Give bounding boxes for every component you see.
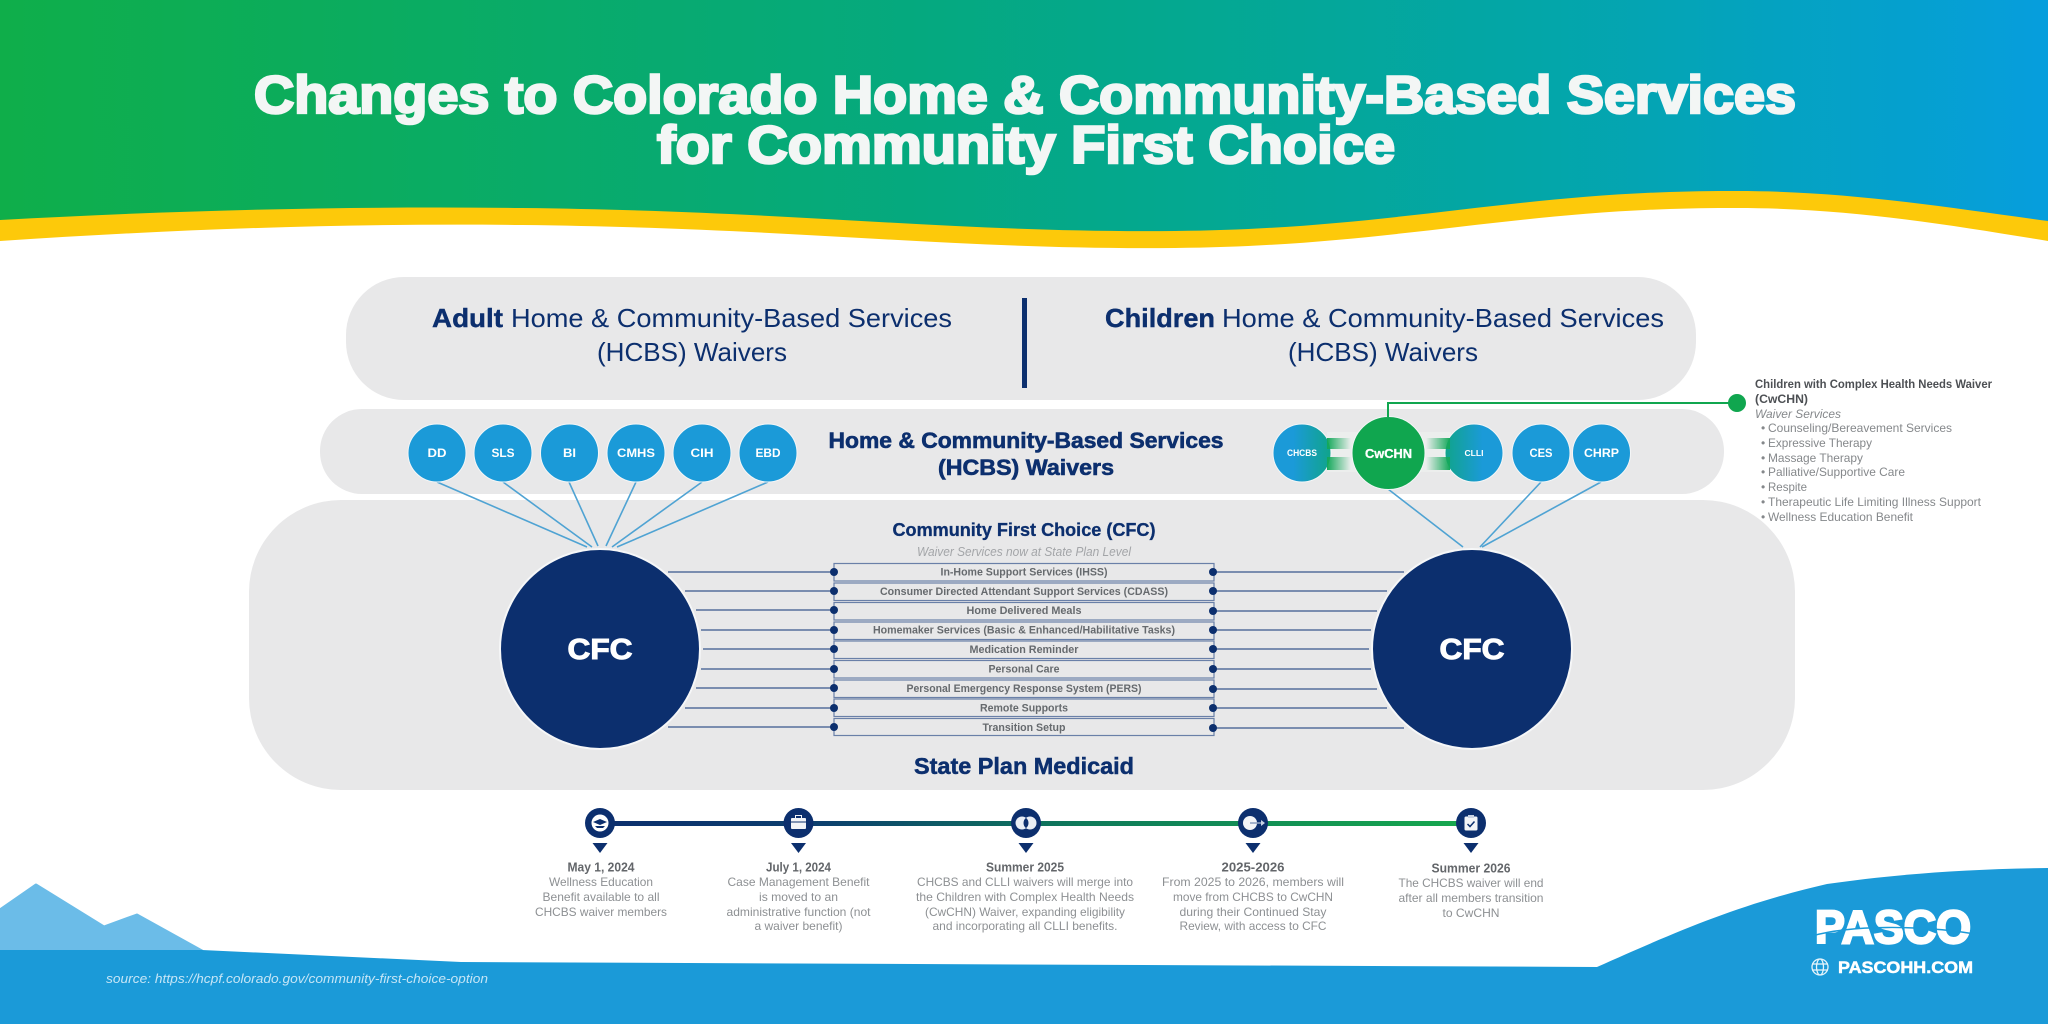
panel: HCBS waivers band: (HCBS) Waivers bbox=[938, 455, 1114, 480]
right waiver circles: CES bbox=[1530, 448, 1553, 460]
right waiver circles: CLLI bbox=[1464, 448, 1484, 458]
callout: CwCHN waiver services: Counseling/Bereavement Services bbox=[1768, 421, 1952, 435]
callout: CwCHN waiver services: • bbox=[1761, 480, 1765, 494]
callout: CwCHN waiver services: • bbox=[1761, 495, 1765, 509]
timeline milestone: Summer 2026 bbox=[1398, 808, 1544, 920]
title: for Community First Choice bbox=[657, 116, 1395, 175]
callout: CwCHN waiver services: • bbox=[1761, 436, 1765, 450]
callout: CwCHN waiver services: • bbox=[1761, 421, 1765, 435]
right CFC circle bbox=[1372, 549, 1572, 749]
timeline milestone: July 1, 2024: Case Management Benefit bbox=[728, 875, 870, 889]
PASCO logo: PASCO bbox=[1815, 901, 1971, 953]
panel: adult and children waivers: (HCBS) Waivers bbox=[1288, 337, 1478, 367]
timeline milestone: Summer 2026: The CHCBS waiver will end bbox=[1398, 876, 1544, 890]
connector lines: left waivers to CFC bbox=[437, 482, 768, 547]
callout connector: CwCHN to details bbox=[1388, 394, 1746, 417]
timeline milestone: Summer 2025: and incorporating all CLLI benefits. bbox=[932, 919, 1118, 933]
timeline milestone: July 1, 2024: is moved to an bbox=[759, 890, 838, 904]
timeline milestone: 2025-2026: during their Continued Stay bbox=[1180, 905, 1326, 919]
timeline milestone: Summer 2025: the Children with Complex Health Needs bbox=[916, 890, 1134, 904]
left waiver circles: DD bbox=[428, 448, 446, 460]
connector lines: right waivers to CFC bbox=[1388, 482, 1601, 547]
panel: adult and children waivers: Adult bbox=[432, 303, 503, 333]
left waiver circles bbox=[408, 424, 797, 482]
panel: adult and children waivers bbox=[346, 277, 1696, 400]
services list: Personal Emergency Response System (PERS) bbox=[906, 683, 1142, 695]
panel: HCBS waivers band bbox=[320, 409, 1724, 494]
timeline milestone: Summer 2026: after all members transition bbox=[1398, 891, 1544, 905]
timeline line bbox=[600, 821, 1471, 826]
callout: CwCHN waiver services: Waiver Services bbox=[1755, 407, 1841, 421]
right waiver circles: CwCHN bbox=[1365, 446, 1412, 461]
timeline milestone: May 1, 2024: Benefit available to all bbox=[542, 890, 660, 904]
timeline milestone: Summer 2026: to CwCHN bbox=[1442, 906, 1500, 920]
left waiver circles: CMHS bbox=[617, 448, 655, 460]
timeline milestone: July 1, 2024 bbox=[726, 808, 871, 933]
timeline milestone: Summer 2026: Summer 2026 bbox=[1432, 860, 1510, 876]
header banner bbox=[0, 0, 2048, 280]
callout: CwCHN waiver services: Palliative/Supportive Care bbox=[1768, 465, 1905, 479]
title bbox=[254, 66, 1796, 175]
left waiver circles: BI bbox=[563, 448, 576, 460]
callout: CwCHN waiver services: Massage Therapy bbox=[1768, 451, 1863, 465]
source note: source: https://hcpf.colorado.gov/community-first-choice-option bbox=[106, 971, 488, 986]
timeline milestone: Summer 2025 bbox=[916, 808, 1134, 933]
panel: state plan medicaid: Community First Choice (CFC) bbox=[892, 520, 1156, 540]
callout: CwCHN waiver services: • bbox=[1761, 451, 1765, 465]
callout: CwCHN waiver services: (CwCHN) bbox=[1755, 394, 1808, 406]
callout: CwCHN waiver services: Respite bbox=[1768, 480, 1807, 494]
callout: CwCHN waiver services: Wellness Education Benefit bbox=[1768, 510, 1914, 524]
right waiver circles bbox=[1273, 416, 1630, 490]
callout: CwCHN waiver services: • bbox=[1761, 510, 1765, 524]
timeline milestone: July 1, 2024: July 1, 2024 bbox=[766, 860, 832, 874]
services list bbox=[834, 564, 1214, 736]
panel: state plan medicaid: Waiver Services now at State Plan Level bbox=[917, 545, 1132, 559]
timeline milestone: May 1, 2024: Wellness Education bbox=[549, 875, 653, 889]
callout: CwCHN waiver services: Therapeutic Life Limiting Illness Support bbox=[1768, 495, 1982, 509]
timeline milestone: July 1, 2024: a waiver benefit) bbox=[754, 919, 842, 933]
panel: adult and children waivers: Children bbox=[1105, 303, 1215, 333]
timeline milestone: May 1, 2024 bbox=[535, 808, 667, 919]
right waiver circles: CHCBS bbox=[1287, 448, 1317, 458]
panel: HCBS waivers band: Home & Community-Based Services bbox=[828, 428, 1224, 453]
right waiver circles: CHRP bbox=[1584, 448, 1619, 460]
left waiver circles: EBD bbox=[756, 448, 780, 460]
timeline milestone: 2025-2026: Review, with access to CFC bbox=[1180, 919, 1327, 933]
panel: adult and children waivers: (HCBS) Waivers bbox=[597, 337, 787, 367]
left waiver circles: SLS bbox=[492, 448, 515, 460]
panel: state plan medicaid bbox=[249, 500, 1795, 790]
right CFC circle: CFC bbox=[1440, 634, 1505, 666]
callout: CwCHN waiver services: • bbox=[1761, 465, 1765, 479]
timeline milestone: Summer 2025: (CwCHN) Waiver, expanding eligibility bbox=[925, 905, 1125, 919]
timeline milestone: 2025-2026: From 2025 to 2026, members will bbox=[1162, 875, 1344, 889]
callout: CwCHN waiver services: Expressive Therapy bbox=[1768, 436, 1872, 450]
panel: adult and children waivers: Home & Community-Based Services bbox=[511, 303, 952, 333]
services list: Homemaker Services (Basic & Enhanced/Habilitative Tasks) bbox=[873, 624, 1175, 636]
title: Changes to Colorado Home & Community-Based Services bbox=[254, 66, 1796, 125]
timeline milestone: Summer 2025: CHCBS and CLLI waivers will merge into bbox=[917, 875, 1133, 889]
services list: Transition Setup bbox=[982, 722, 1066, 734]
left waiver circles: CIH bbox=[690, 448, 714, 460]
website link with globe icon: PASCOHH.COM bbox=[1838, 958, 1973, 977]
timeline milestone: July 1, 2024: administrative function (not bbox=[726, 905, 871, 919]
services list: Consumer Directed Attendant Support Services (CDASS) bbox=[880, 586, 1168, 598]
timeline milestone: 2025-2026: move from CHCBS to CwCHN bbox=[1173, 890, 1333, 904]
callout: CwCHN waiver services bbox=[1755, 379, 1993, 524]
left CFC circle bbox=[500, 549, 700, 749]
services list: Medication Reminder bbox=[970, 644, 1079, 656]
services list: Remote Supports bbox=[980, 702, 1068, 714]
panel: state plan medicaid: State Plan Medicaid bbox=[914, 753, 1134, 779]
callout: CwCHN waiver services: Children with Complex Health Needs Waiver bbox=[1755, 379, 1993, 391]
service row connector dots bbox=[830, 568, 1217, 732]
panel: adult and children waivers: Home & Community-Based Services bbox=[1222, 303, 1664, 333]
services list: In-Home Support Services (IHSS) bbox=[940, 566, 1108, 578]
services list: Personal Care bbox=[988, 664, 1060, 676]
timeline milestone: May 1, 2024: CHCBS waiver members bbox=[535, 905, 667, 919]
timeline milestone: 2025-2026 bbox=[1162, 808, 1344, 933]
timeline milestone: 2025-2026: 2025-2026 bbox=[1222, 860, 1284, 874]
timeline milestone: May 1, 2024: May 1, 2024 bbox=[568, 860, 635, 874]
services list: Home Delivered Meals bbox=[966, 605, 1082, 617]
left CFC circle: CFC bbox=[568, 634, 633, 666]
left connector lines to services bbox=[668, 572, 834, 727]
right connector lines to services bbox=[1213, 572, 1404, 728]
footer band bbox=[0, 868, 2048, 1024]
timeline milestone: Summer 2025: Summer 2025 bbox=[986, 860, 1064, 874]
